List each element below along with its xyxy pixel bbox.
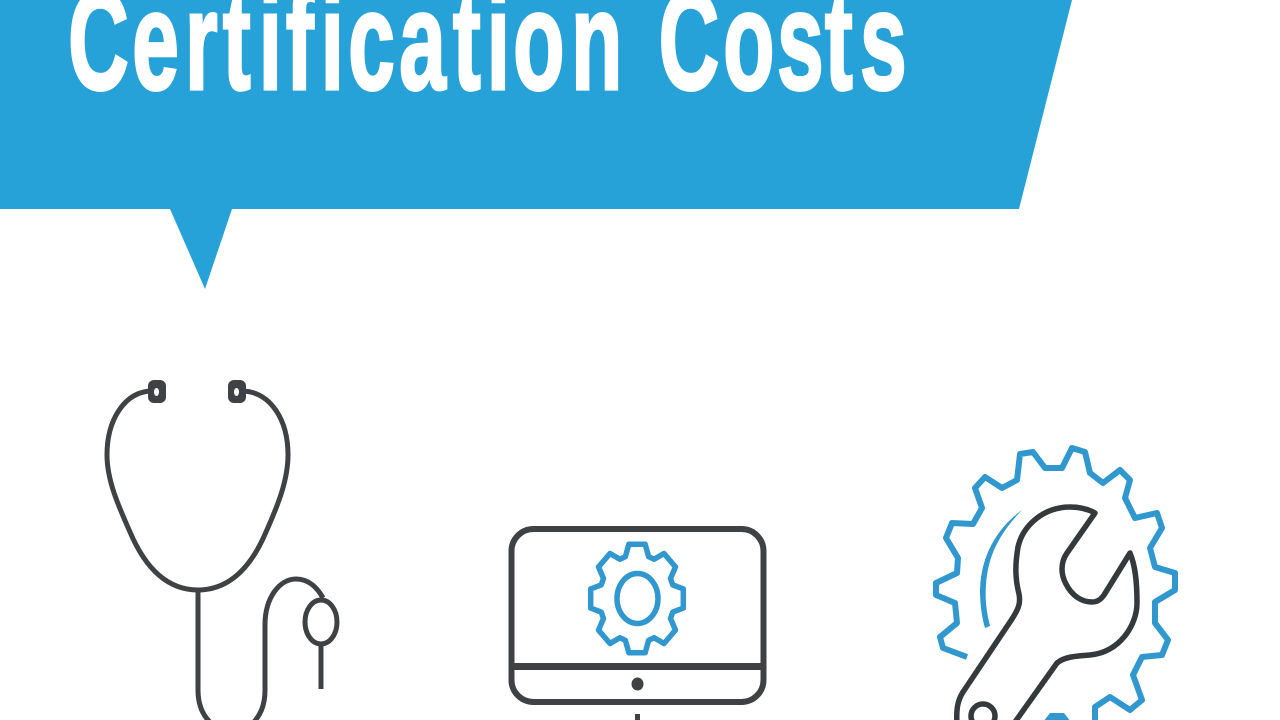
gear inner arc: [980, 510, 1022, 628]
gear hub: [1043, 713, 1071, 720]
monitor divider: [511, 663, 764, 670]
wrench hole: [971, 704, 995, 720]
monitor button: [632, 678, 644, 690]
icon: computer monitor with gear: [511, 529, 764, 720]
icon: wrench and gear: [936, 448, 1175, 720]
monitor frame: [512, 529, 764, 702]
icon: blue gear: [591, 544, 683, 653]
icon: right earpiece: [228, 380, 246, 403]
icon: left earpiece: [148, 380, 166, 403]
gear outline: [936, 448, 1175, 720]
wrench outline: [957, 507, 1137, 720]
monitor stand: [635, 714, 640, 720]
panel: blue speech banner: [0, 0, 1072, 289]
icon: stethoscope: [107, 380, 337, 720]
